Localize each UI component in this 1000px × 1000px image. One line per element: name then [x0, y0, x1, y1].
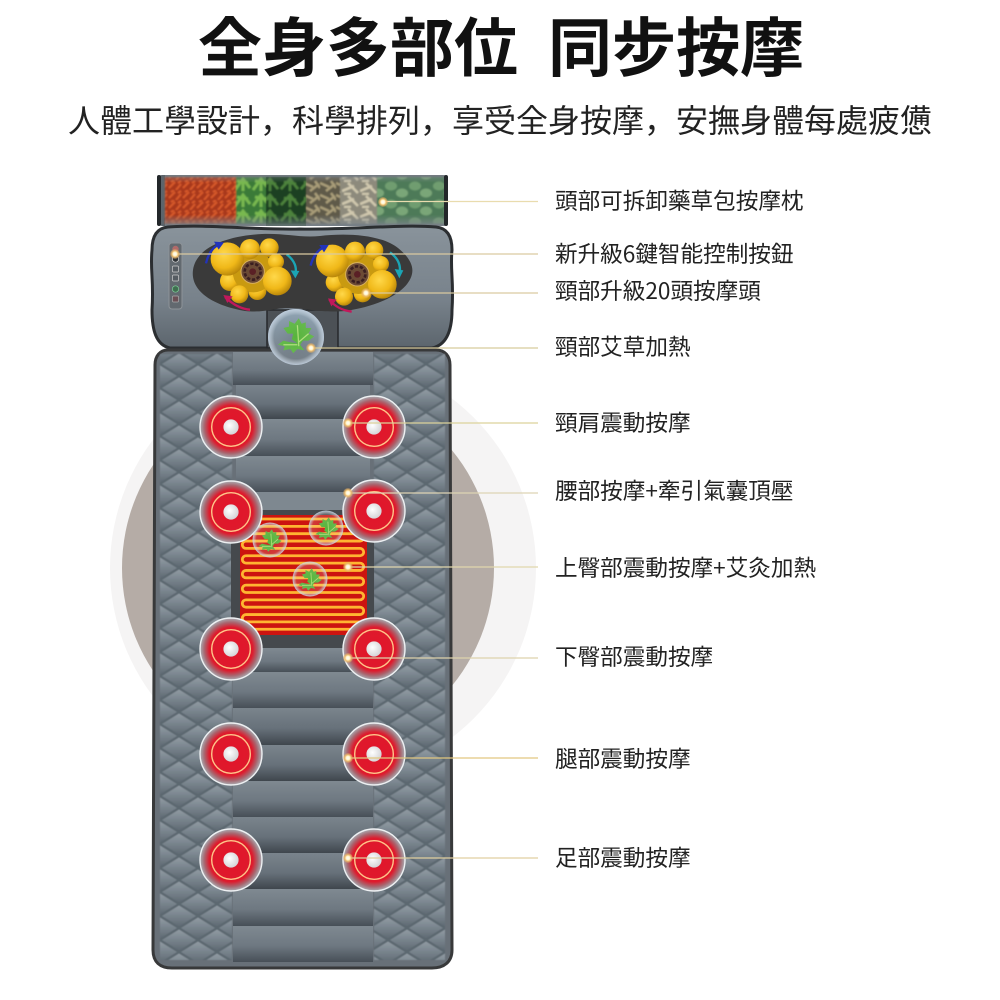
label: upper hip: 上臀部震動按摩+艾灸加熱 [555, 550, 816, 583]
title: 同步按摩 [548, 0, 804, 90]
vibration massage points [200, 396, 405, 891]
label: neck heads: 頸部升級20頭按摩頭 [555, 273, 761, 306]
control panel [169, 243, 182, 309]
title [198, 0, 804, 90]
label: control buttons: 新升級6鍵智能控制按鈕 [555, 236, 793, 269]
label: herb pillow: 頭部可拆卸藥草包按摩枕 [555, 183, 804, 216]
quilted side panels [160, 354, 445, 960]
moxa herb bubbles on heating pad [252, 510, 344, 596]
center padded bands [233, 352, 373, 962]
rotation arrows [206, 244, 400, 312]
label: waist: 腰部按摩+牽引氣囊頂壓 [555, 473, 793, 506]
label: neck shoulder: 頸肩震動按摩 [555, 405, 691, 438]
heating pad [231, 510, 374, 648]
background circles [110, 398, 536, 736]
neck pillow [151, 226, 453, 348]
herb pillow roll [157, 175, 448, 226]
label: foot: 足部震動按摩 [555, 840, 691, 873]
neck channel [267, 310, 338, 348]
massage head plate [193, 234, 412, 311]
massage balls left and right [206, 238, 403, 312]
label: neck moxa: 頸部艾草加熱 [555, 329, 691, 362]
neck moxa bubble [268, 309, 324, 365]
label: leg: 腿部震動按摩 [555, 741, 691, 774]
label: lower hip: 下臀部震動按摩 [555, 639, 713, 672]
title: 全身多部位 [198, 0, 518, 90]
leader lines and dots [170, 197, 538, 863]
full-body mat [153, 350, 452, 968]
subtitle: 人體工學設計，科學排列，享受全身按摩，安撫身體每處疲憊 [68, 96, 932, 142]
